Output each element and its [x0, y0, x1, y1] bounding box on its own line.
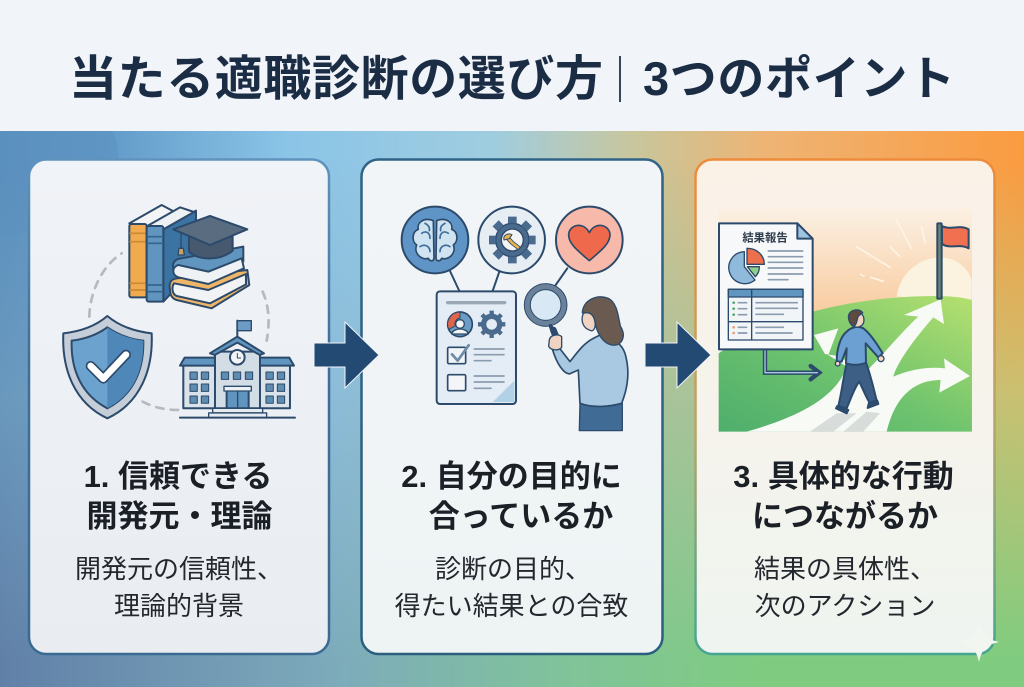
- report arrow: [765, 349, 819, 379]
- panel: 3 leads to concrete action: [696, 160, 994, 654]
- illustration: books, shield and school: [63, 205, 295, 418]
- description 2: 得たい結果との合致: [395, 591, 628, 621]
- heading 2: [401, 459, 622, 534]
- description 3: 結果の具体性、: [754, 554, 936, 584]
- icon: school building: [180, 321, 295, 418]
- heading 2: 2. 自分の目的に: [401, 459, 622, 494]
- heading 3: につながるか: [752, 499, 938, 534]
- title: 当たる適職診断の選び方: [69, 53, 603, 106]
- background cloud shape: [0, 131, 118, 238]
- description 3: 次のアクション: [755, 591, 935, 621]
- description 2: 診断の目的、: [435, 554, 591, 584]
- icon: stacked books: [170, 247, 249, 308]
- header band: [0, 0, 1024, 131]
- title: 3つのポイント: [643, 52, 955, 105]
- icon: sparkle: [959, 622, 999, 662]
- document: [437, 291, 516, 404]
- sunrise landscape: [719, 207, 972, 432]
- heading 1: 1. 信頼できる: [84, 459, 272, 494]
- icon: shield with check: [63, 316, 152, 418]
- description 1: 開発元の信頼性、: [75, 554, 283, 584]
- heading 1: [84, 459, 272, 534]
- walking person: [835, 310, 884, 413]
- icon: graduation cap: [173, 216, 247, 258]
- woman with magnifier: [524, 284, 628, 431]
- illustration: diagnosis sheet and woman with magnifier: [402, 207, 628, 431]
- dashed cycle: [89, 253, 269, 410]
- icon: upright books: [129, 205, 196, 302]
- description 1: 理論的背景: [114, 591, 244, 621]
- panel: 1 trustworthy developer: [29, 160, 329, 654]
- description 2: [395, 554, 628, 621]
- illustration: report and walking person: [719, 207, 972, 432]
- icon: brain: [402, 207, 468, 273]
- connector lines: [450, 268, 567, 291]
- heading 3: [733, 459, 954, 534]
- heading 2: 合っているか: [429, 499, 613, 534]
- arrow: step 2 to 3: [645, 322, 711, 388]
- description 3: [754, 554, 936, 621]
- title: [69, 52, 955, 106]
- description 1: [75, 554, 283, 621]
- report document: [719, 223, 813, 349]
- icon: gear and wrench: [478, 207, 545, 273]
- report document: 結果報告: [742, 230, 788, 244]
- icon: heart: [556, 207, 623, 273]
- heading 3: 3. 具体的な行動: [733, 459, 954, 494]
- heading 1: 開発元・理論: [86, 499, 272, 534]
- arrow: step 1 to 2: [314, 322, 379, 388]
- panel: 2 matches your purpose: [362, 160, 662, 654]
- flag: [937, 223, 969, 299]
- white paths: [747, 299, 970, 432]
- shadows on path: [810, 412, 880, 432]
